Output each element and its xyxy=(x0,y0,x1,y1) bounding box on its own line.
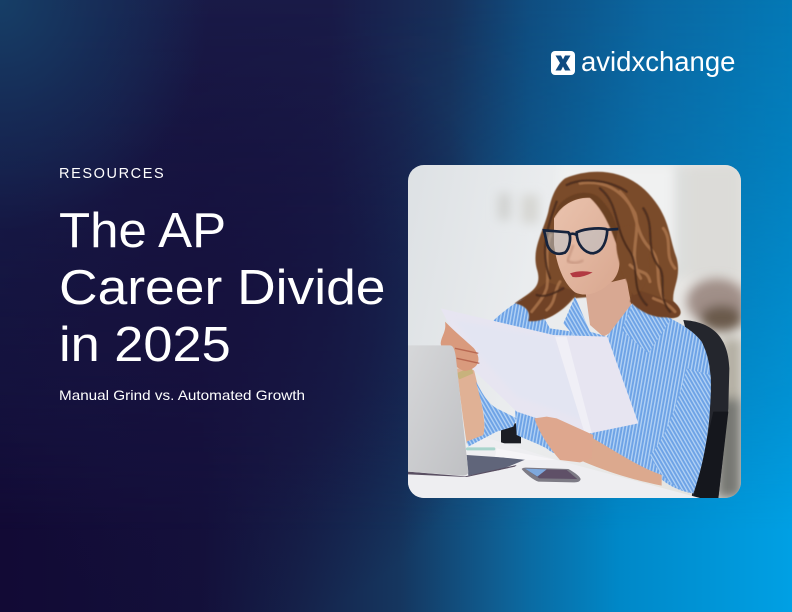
face xyxy=(554,198,620,295)
background wall xyxy=(408,165,741,498)
left cuff xyxy=(467,382,517,447)
title: The AP xyxy=(59,204,226,258)
watch xyxy=(456,367,473,379)
laptop keyboard xyxy=(467,455,527,476)
table xyxy=(408,437,700,498)
logo: avidxchange xyxy=(551,46,735,77)
logo wordmark: avidxchange xyxy=(581,46,735,77)
teal pen on table xyxy=(466,447,495,450)
eyebrow: resources: RESOURCES xyxy=(59,166,165,182)
subtitle: Manual Grind vs. Automated Growth xyxy=(59,387,305,403)
photo: woman reviewing documents at a laptop xyxy=(408,165,741,498)
right hand xyxy=(534,417,593,462)
shirt collar xyxy=(563,297,607,345)
glasses xyxy=(544,228,618,254)
title: in 2025 xyxy=(59,318,231,372)
hair back xyxy=(515,172,680,321)
chair xyxy=(683,320,729,498)
phone xyxy=(522,468,581,482)
hair locks over shoulders xyxy=(515,282,680,321)
document xyxy=(441,308,638,434)
background plant xyxy=(687,278,747,498)
laptop lid xyxy=(408,345,468,476)
right sleeve xyxy=(650,368,711,493)
neck xyxy=(585,278,637,337)
right forearm xyxy=(583,435,662,486)
hair front and curls xyxy=(532,181,675,312)
left hand xyxy=(441,322,478,371)
title xyxy=(59,204,386,372)
title: Career Divide xyxy=(59,261,386,315)
shirt xyxy=(493,297,711,493)
left arm xyxy=(457,368,484,443)
nose xyxy=(567,245,583,263)
papers on table xyxy=(495,448,557,460)
lips xyxy=(570,271,593,277)
icon: logo mark xyxy=(551,51,575,75)
